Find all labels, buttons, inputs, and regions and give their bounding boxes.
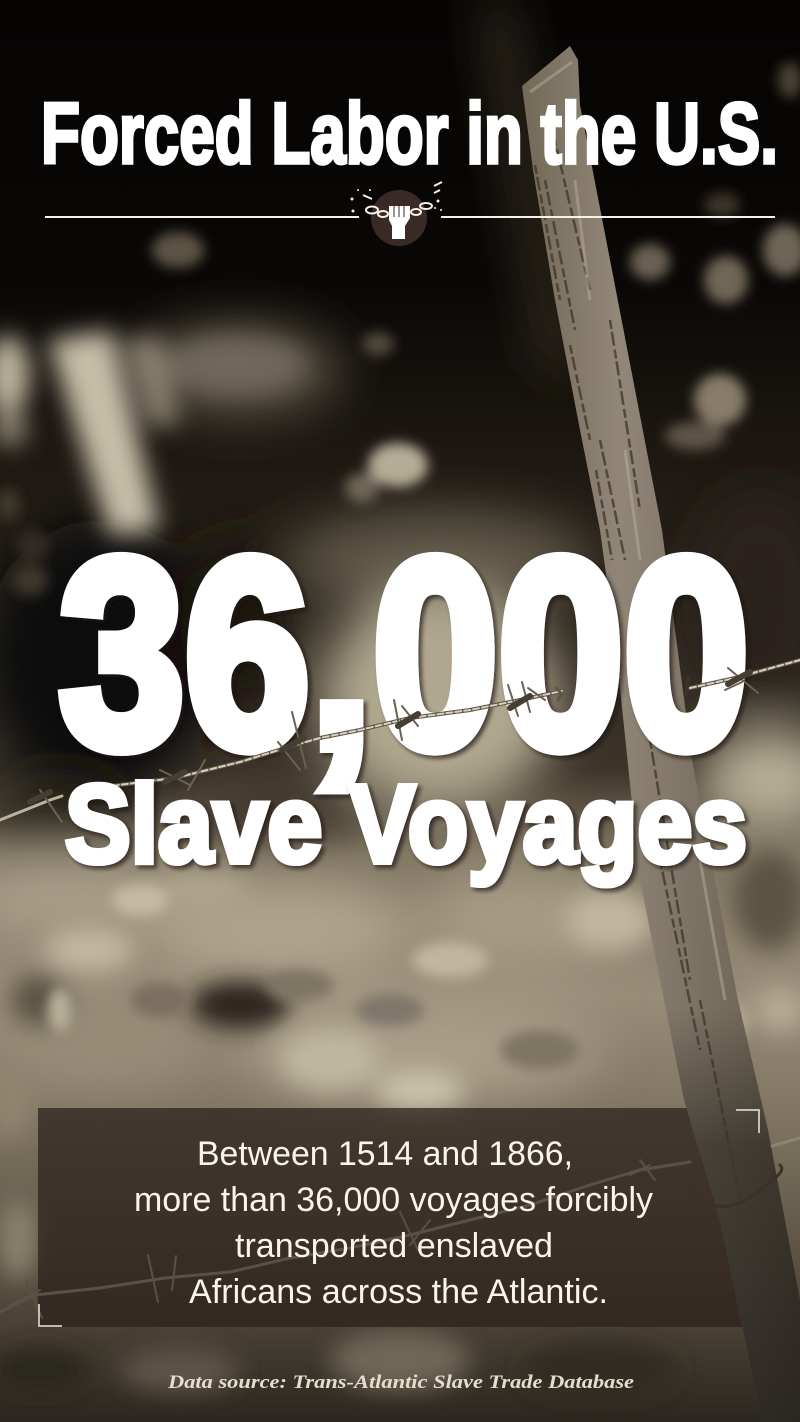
upper barbed wire <box>0 660 800 822</box>
corner bracket: bottom left <box>39 1304 62 1326</box>
data source: Data source: Trans-Atlantic Slave Trade Database <box>167 1372 635 1393</box>
caption text <box>134 1135 653 1311</box>
lower barbed wire <box>0 1138 800 1318</box>
caption text: Africans across the Atlantic. <box>189 1273 608 1311</box>
wooden fence post <box>522 46 800 1422</box>
divider rule: right <box>441 216 775 218</box>
icon: raised fist breaking chains <box>350 182 442 246</box>
dark caption panel <box>38 1108 745 1327</box>
caption text: Between 1514 and 1866, <box>197 1135 573 1173</box>
caption text: transported enslaved <box>235 1227 553 1265</box>
divider rule: left <box>45 216 359 218</box>
caption text: more than 36,000 voyages forcibly <box>134 1181 653 1219</box>
corner bracket: top right <box>736 1110 759 1133</box>
